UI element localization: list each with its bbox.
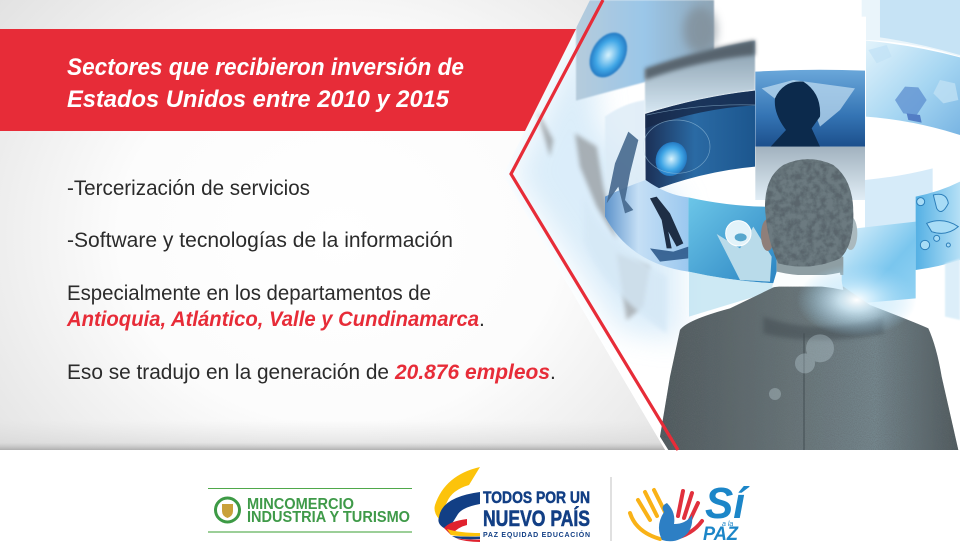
pale blue blurred wash: [515, 10, 680, 340]
collar: [772, 272, 843, 290]
grey blur on top left screen: [683, 7, 717, 53]
faded top screens: [862, 0, 960, 57]
departments list: Antioquia, Atlántico, Valle y Cundinamarca: [66, 308, 479, 331]
ears: [761, 217, 857, 251]
jacket shadows: [763, 317, 883, 340]
flag tail yellow: [447, 529, 480, 536]
flag tail blue: [452, 536, 480, 539]
yellow swoosh: [434, 467, 480, 519]
wordmark line 1: TODOS POR UN: [483, 488, 590, 507]
departments lead-in: Especialmente en los departamentos de: [67, 282, 431, 305]
wordmark line 2: INDUSTRIA Y TURISMO: [247, 509, 410, 526]
screen: pale rays: [865, 168, 933, 230]
left pale cylinder: [605, 100, 646, 180]
neck: [777, 257, 843, 275]
light flare: [797, 263, 917, 337]
blue silhouettes: [607, 132, 688, 262]
divider: [610, 477, 612, 541]
shadow figures: [537, 110, 650, 320]
sector 2: -Software y tecnologías de la información: [67, 229, 453, 252]
sector 1: -Tercerización de servicios: [67, 177, 310, 200]
logo: Todos por un nuevo país: [434, 467, 590, 542]
screen: water drops: [916, 182, 960, 270]
orbit lines: [643, 105, 755, 173]
dark band top: [645, 40, 755, 80]
pale screen lower right: [945, 258, 960, 320]
logo: Mincomercio: [208, 488, 412, 532]
reflection under head screen: [755, 147, 865, 200]
head hair: [765, 159, 853, 267]
hand: [717, 227, 772, 282]
full stop: .: [479, 308, 485, 331]
wordmark Si: Sí: [705, 479, 750, 528]
seal: [216, 498, 240, 522]
screen: hand holding globe: [688, 197, 777, 283]
hexagons: [868, 45, 958, 123]
screen: building: [842, 222, 916, 305]
title line 2: Estados Unidos entre 2010 y 2015: [67, 86, 450, 113]
title band: [0, 29, 576, 131]
body text: [66, 177, 556, 384]
blurred shadow band: [645, 41, 755, 113]
centre seam: [804, 334, 805, 450]
red swoosh: [444, 519, 467, 535]
jacket: [660, 287, 958, 450]
small crystal globe: [726, 221, 751, 246]
screen: top left blurred: [576, 0, 714, 101]
tagline: PAZ EQUIDAD EDUCACIÓN: [483, 530, 590, 539]
yellow hand: [630, 490, 665, 539]
lens flare circles: [769, 334, 834, 400]
flag tail red: [456, 538, 480, 542]
reflection under hand: [689, 272, 777, 317]
blurred globe: [588, 32, 628, 78]
head silhouette: [771, 82, 820, 147]
dark top strip: [645, 91, 755, 128]
wordmark line 1: MINCOMERCIO: [247, 496, 354, 513]
jobs figure: 20.876 empleos: [394, 361, 550, 384]
shield: [222, 504, 233, 518]
red hand: [672, 491, 702, 539]
earth globe: [656, 142, 687, 176]
screen: businessman: [605, 180, 688, 272]
jobs lead-in: Eso se tradujo en la generación de: [67, 361, 389, 384]
screen: molecules: [866, 41, 960, 135]
photo: man facing floating screens: [503, 0, 960, 450]
red banner: [0, 29, 576, 131]
logo: Sí a la paz: [630, 479, 750, 545]
world map: [762, 80, 855, 127]
wordmark Paz: PAZ: [703, 524, 739, 545]
screen: earth orbit: [645, 91, 755, 193]
full stop: .: [550, 361, 556, 384]
blue swoosh: [438, 492, 480, 530]
blurred lower left ring: [616, 253, 666, 331]
wordmark line 2: NUEVO PAÍS: [483, 506, 590, 531]
dove centre: [659, 503, 692, 541]
red chevron line: [511, 0, 678, 450]
globe land: [735, 233, 747, 241]
drops: [917, 194, 958, 250]
blue top screen: [880, 0, 960, 55]
screen: head with world map: [755, 70, 865, 147]
wordmark a la: a la: [722, 521, 733, 528]
title line 1: Sectores que recibieron inversión de: [67, 54, 464, 81]
